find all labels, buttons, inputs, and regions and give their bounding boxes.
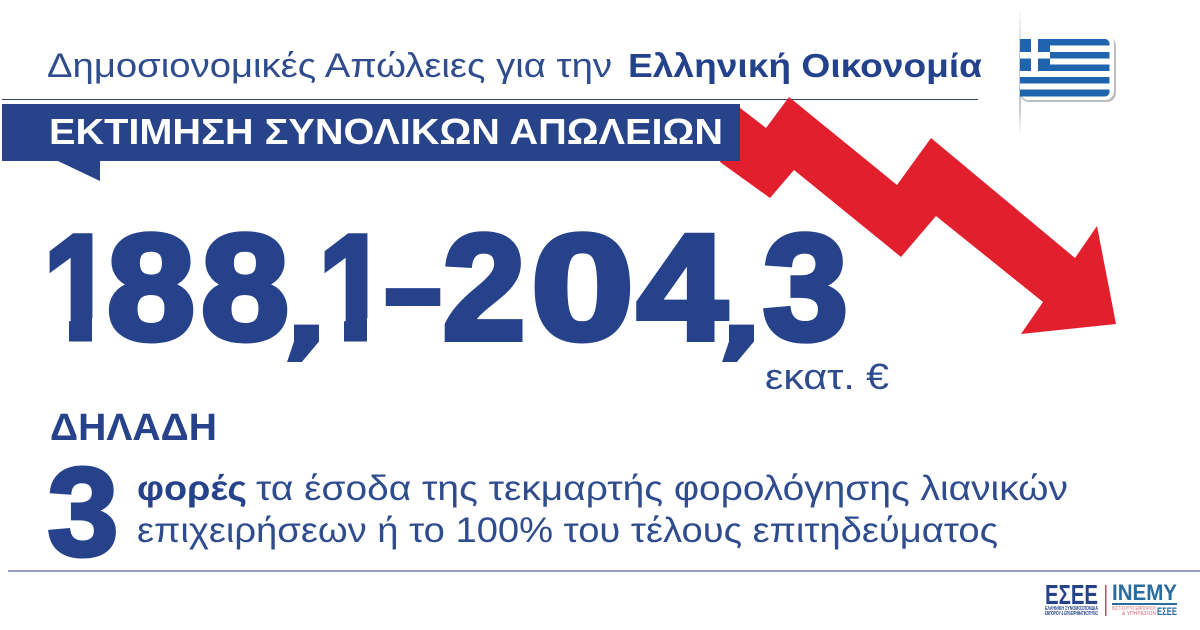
icon: Greek flag [1019,8,1116,134]
description text: επιχειρήσεων ή το 100% του τέλους επιτηδεύματος [137,511,998,550]
logo: ESEE: ΕΣΕΕ [1045,579,1098,610]
big digit 3: 3 [48,443,118,582]
logo: ESEE: ΕΜΠΟΡΙΟΥ & ΕΠΙΧΕΙΡΗΜΑΤΙΚΟΤΗΤΑΣ [1045,611,1098,617]
title: Δημοσιονομικές Απώλειες για την [47,47,612,85]
big number: 3 [763,203,848,371]
big number: - [377,200,449,368]
logo: INEMY [1112,580,1177,618]
big number: 2 [442,203,526,371]
unit label: εκατ. € [765,356,889,397]
description text: τα έσοδα της τεκμαρτής φορολόγησης λιανικών [256,469,1068,508]
logo: INEMY: & ΥΠΗΡΕΣΙΩΝ [1122,611,1156,617]
logo: INEMY: ΕΣΕΕ [1157,606,1177,618]
description text [137,469,1068,550]
banner: estimate of total losses: ΕΚΤΙΜΗΣΗ ΣΥΝΟΛΙΚΩΝ ΑΠΩΛΕΙΩΝ [49,111,723,152]
big number: 1 [43,203,114,371]
logo: ESEE: ΕΛΛΗΝΙΚΗ ΣΥΝΟΜΟΣΠΟΝΔΙΑ [1045,606,1098,612]
big number: , [280,241,334,373]
banner: estimate of total losses [2,104,740,181]
big number: 8 [201,203,289,371]
big number: 1 [318,203,389,371]
description text: φορές [137,469,247,508]
big number: , [714,241,768,373]
title: Ελληνική Οικονομία [628,47,982,84]
logo: INEMY: INEMY [1112,580,1177,605]
heading: that is: ΔΗΛΑΔΗ [50,407,217,449]
logo: INEMY: ΙΝΣΤΙΤΟΥΤΟ ΕΜΠΟΡΙΟΥ [1112,606,1157,612]
big number: 8 [107,203,195,371]
arrow: falling red trend [720,97,1116,334]
big number [38,200,848,373]
big number: 4 [637,203,727,371]
logo: ESEE [1045,579,1098,617]
big number: 0 [531,203,634,371]
title [47,47,982,85]
